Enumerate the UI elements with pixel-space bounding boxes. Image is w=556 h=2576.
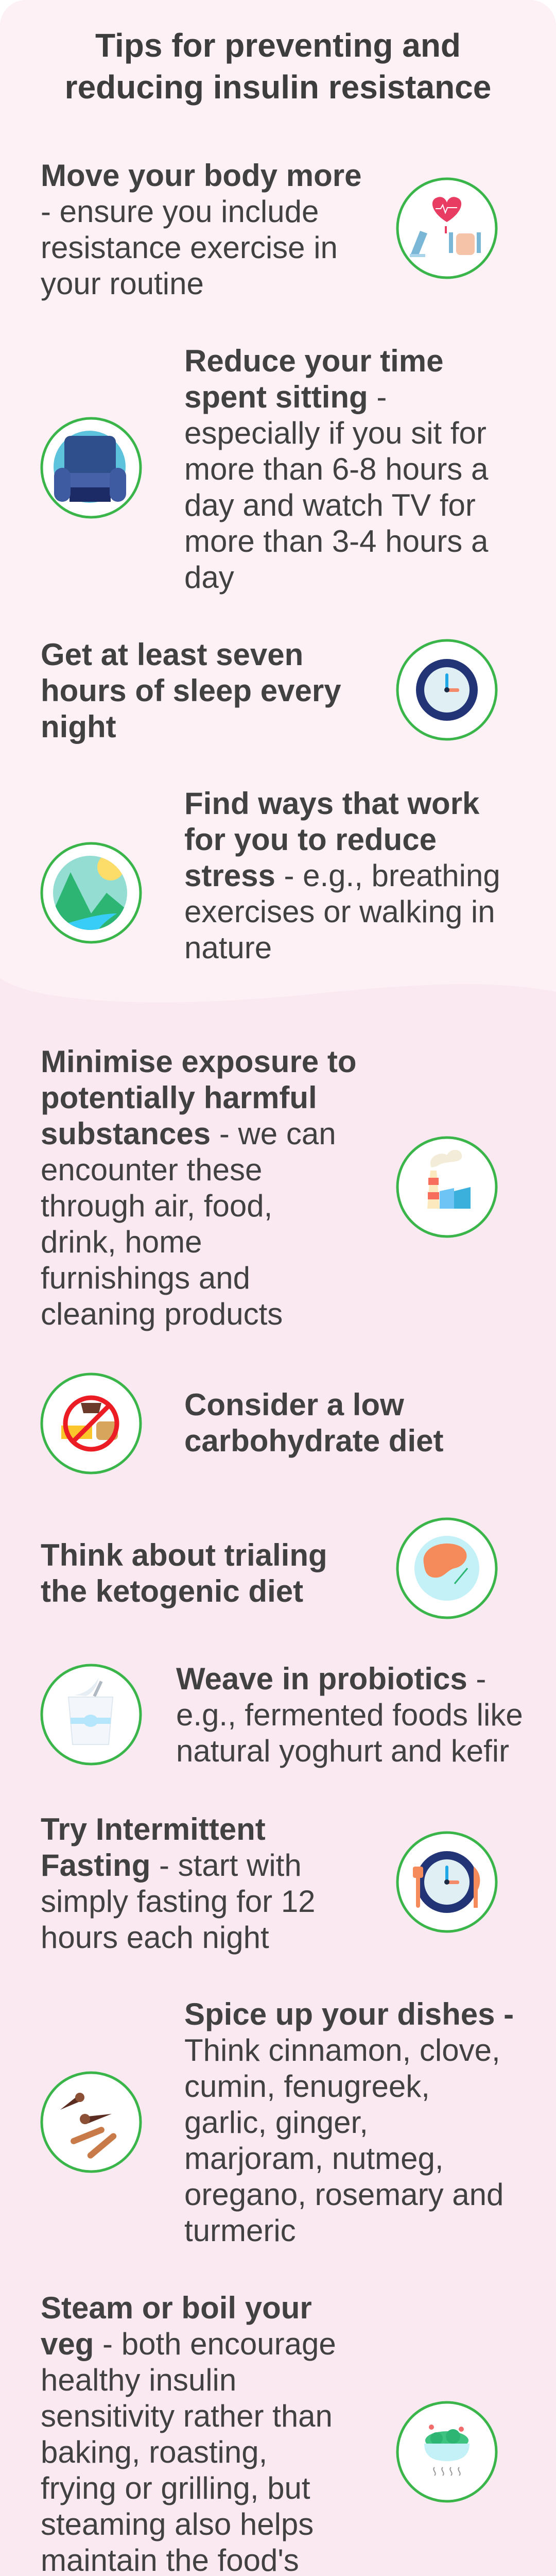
tip: harmful substances: substances - we can (41, 1116, 336, 1151)
tip: probiotics (176, 1662, 523, 1768)
tip: intermittent fasting: Fasting - start with (41, 1848, 302, 1883)
tip: probiotics: e.g., fermented foods like (176, 1698, 523, 1732)
tip: harmful substances: Minimise exposure to (41, 1044, 356, 1079)
tip: spices: oregano, rosemary and (184, 2177, 503, 2212)
tip: stress: for you to reduce (184, 822, 437, 857)
tip: stress: Find ways that work (184, 786, 479, 821)
tip: spices: cumin, fenugreek, (184, 2069, 430, 2104)
icon: spices (40, 2071, 142, 2173)
tip: reduce sitting: day and watch TV for (184, 488, 476, 522)
icon: no carbs (40, 1372, 142, 1475)
tip: reduce sitting: more than 3-4 hours a (184, 524, 488, 558)
tip: harmful substances: encounter these (41, 1153, 262, 1187)
tip: sleep: night (41, 709, 116, 744)
tip: harmful substances: furnishings and (41, 1261, 250, 1295)
tip: harmful substances: drink, home (41, 1225, 202, 1259)
tip: steam veg: baking, roasting, (41, 2435, 267, 2469)
tip: probiotics: Weave in probiotics - (176, 1662, 486, 1696)
tip: move your body: resistance exercise in (41, 230, 338, 265)
tip: sleep: hours of sleep every (41, 673, 341, 708)
icon: steak (396, 1518, 497, 1619)
tip: harmful substances: through air, food, (41, 1189, 272, 1223)
icon: yoghurt (40, 1664, 142, 1765)
title: Tips for preventing and (95, 27, 461, 64)
tip: steam veg: frying or grilling, but (41, 2471, 310, 2505)
tip: move your body: - ensure you include (41, 194, 319, 229)
tip: steam veg (41, 2291, 336, 2576)
tip: reduce sitting: more than 6-8 hours a (184, 452, 488, 486)
tip: ketogenic: Think about trialing (41, 1538, 327, 1572)
tip: stress: nature (184, 930, 272, 965)
tip: ketogenic (41, 1538, 327, 1608)
tip: steam veg: Steam or boil your (41, 2291, 312, 2325)
icon: exercise (396, 177, 497, 279)
title (65, 27, 491, 106)
tip: reduce sitting: spent sitting - (184, 380, 387, 414)
tip: ketogenic: the ketogenic diet (41, 1574, 303, 1608)
tip: harmful substances (41, 1044, 356, 1331)
tip: intermittent fasting: Try Intermittent (41, 1812, 266, 1846)
tip: move your body (41, 158, 361, 301)
tip: reduce sitting: especially if you sit for (184, 416, 486, 450)
tip: steam veg: steaming also helps (41, 2507, 314, 2541)
icon: landscape (40, 842, 142, 944)
tip: stress: stress - e.g., breathing (184, 858, 500, 893)
icon: clock (396, 639, 497, 741)
tip: steam veg: healthy insulin (41, 2363, 236, 2397)
tip: sleep: Get at least seven (41, 637, 303, 672)
tip: intermittent fasting: simply fasting for 12 (41, 1884, 316, 1919)
tip: low carb: carbohydrate diet (184, 1423, 443, 1458)
tip: spices (184, 1997, 514, 2248)
icon: steamed salad bowl (396, 2401, 497, 2503)
tip: move your body: your routine (41, 266, 204, 301)
tip: reduce sitting: day (184, 560, 234, 595)
tip: stress (184, 786, 500, 965)
tip: steam veg: veg - both encourage (41, 2327, 336, 2361)
tip: reduce sitting (184, 344, 488, 595)
tip: probiotics: natural yoghurt and kefir (176, 1734, 509, 1768)
tip: harmful substances: potentially harmful (41, 1080, 317, 1115)
icon: clock with cutlery (396, 1831, 497, 1933)
tip: reduce sitting: Reduce your time (184, 344, 443, 378)
tip: spices: garlic, ginger, (184, 2105, 368, 2140)
title: reducing insulin resistance (65, 69, 491, 106)
tip: low carb: Consider a low (184, 1387, 404, 1422)
tip: sleep (41, 637, 341, 744)
tip: spices: marjoram, nutmeg, (184, 2141, 444, 2176)
tip: harmful substances: cleaning products (41, 1297, 283, 1331)
tip: move your body: Move your body more (41, 158, 361, 193)
tip: spices: Think cinnamon, clove, (184, 2033, 500, 2067)
tip: intermittent fasting (41, 1812, 316, 1955)
tip: low carb (184, 1387, 443, 1458)
icon: factory (396, 1137, 497, 1238)
tip: spices: turmeric (184, 2213, 296, 2248)
tip: intermittent fasting: hours each night (41, 1920, 269, 1955)
icon: armchair (40, 417, 142, 518)
tip: stress: exercises or walking in (184, 894, 495, 929)
tip: spices: Spice up your dishes - (184, 1997, 514, 2031)
tip: steam veg: sensitivity rather than (41, 2399, 333, 2433)
